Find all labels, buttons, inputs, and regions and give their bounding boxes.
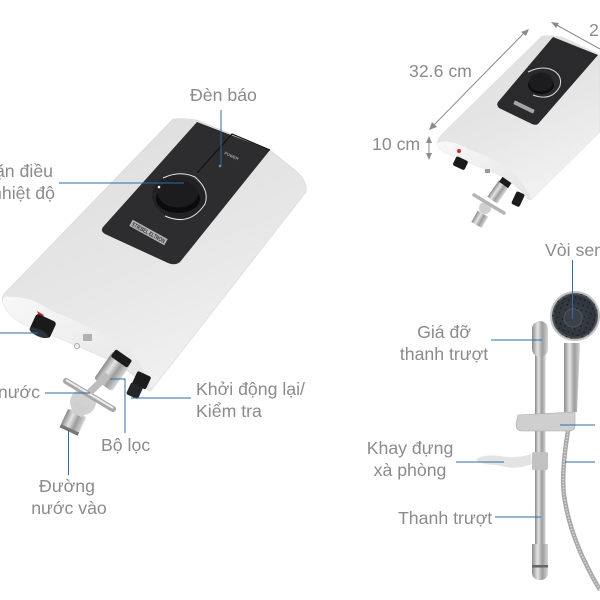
small label marks xyxy=(485,169,490,173)
label: water outlet line xyxy=(0,332,38,334)
label: soap dish xyxy=(367,438,504,480)
dimension: height value: 10 cm xyxy=(372,134,420,154)
reset button xyxy=(126,370,151,401)
label: hose line xyxy=(565,461,595,463)
small control panel xyxy=(497,37,598,125)
brand plate: STIEBEL ELTRON xyxy=(130,222,166,245)
label: slide holder line xyxy=(560,424,595,426)
label: rail bracket: thanh trượt xyxy=(400,344,488,364)
small outlet fitting xyxy=(452,156,468,170)
product label marks xyxy=(74,334,92,348)
small knob xyxy=(528,68,561,97)
water valve cross handle xyxy=(66,375,113,415)
panel slit xyxy=(197,134,270,173)
small heater illustration xyxy=(437,36,600,228)
shower head xyxy=(550,291,600,341)
rail top bracket xyxy=(532,321,548,357)
soap dish xyxy=(476,452,548,470)
control panel xyxy=(102,122,270,264)
shower handle xyxy=(564,343,580,412)
rail collar xyxy=(532,565,548,568)
dimension: length arrow xyxy=(429,29,529,130)
label: reset and check: Kiểm tra xyxy=(196,401,262,421)
dimension: width arrow xyxy=(551,22,600,49)
label: water inlet: nước vào xyxy=(31,498,107,518)
small reset button xyxy=(511,191,525,207)
label: rail bracket: Giá đỡ xyxy=(417,322,471,342)
heater body xyxy=(2,119,306,391)
label: soap dish: Khay đựng xyxy=(367,438,453,458)
dimension: width value: 2 xyxy=(589,20,599,40)
small filter fitting xyxy=(487,176,512,204)
label: indicator light xyxy=(190,85,257,165)
flexible hose xyxy=(563,425,600,590)
label: reset and check xyxy=(131,379,305,421)
slide rail xyxy=(535,340,546,550)
heater underside xyxy=(3,297,152,391)
small brand plate xyxy=(513,100,535,114)
power indicator xyxy=(219,150,239,167)
main heater illustration xyxy=(2,119,306,436)
small heater body xyxy=(437,36,600,200)
label: filter: Bộ lọc xyxy=(101,435,150,455)
dimension: height arrow xyxy=(426,136,432,160)
temperature knob xyxy=(148,170,210,224)
shower set illustration xyxy=(476,291,600,590)
power indicator: POWER xyxy=(224,150,239,161)
rail bottom end xyxy=(532,544,548,580)
slide holder xyxy=(516,412,575,431)
brand plate xyxy=(129,220,168,246)
red mark xyxy=(37,311,44,319)
label: valve xyxy=(0,382,90,402)
label: water inlet: Đường xyxy=(39,476,95,496)
label: shower head xyxy=(545,240,600,319)
label: rail bracket xyxy=(400,322,542,364)
label: slide rail: Thanh trượt xyxy=(398,508,492,528)
filter fitting xyxy=(94,348,133,391)
label: indicator light: Đèn báo xyxy=(190,85,257,105)
dimension: length value: 32.6 cm xyxy=(409,61,472,81)
inlet fitting xyxy=(59,400,91,436)
small underside xyxy=(437,142,531,200)
label: filter xyxy=(101,379,150,455)
small valve xyxy=(471,195,504,228)
black outlet fitting xyxy=(28,313,57,341)
label: water inlet xyxy=(31,430,107,518)
small red mark xyxy=(457,149,461,153)
label: reset and check: Khởi động lại/ xyxy=(196,379,305,399)
label: temperature knob xyxy=(0,161,184,203)
label: soap dish: xà phòng xyxy=(374,460,446,480)
